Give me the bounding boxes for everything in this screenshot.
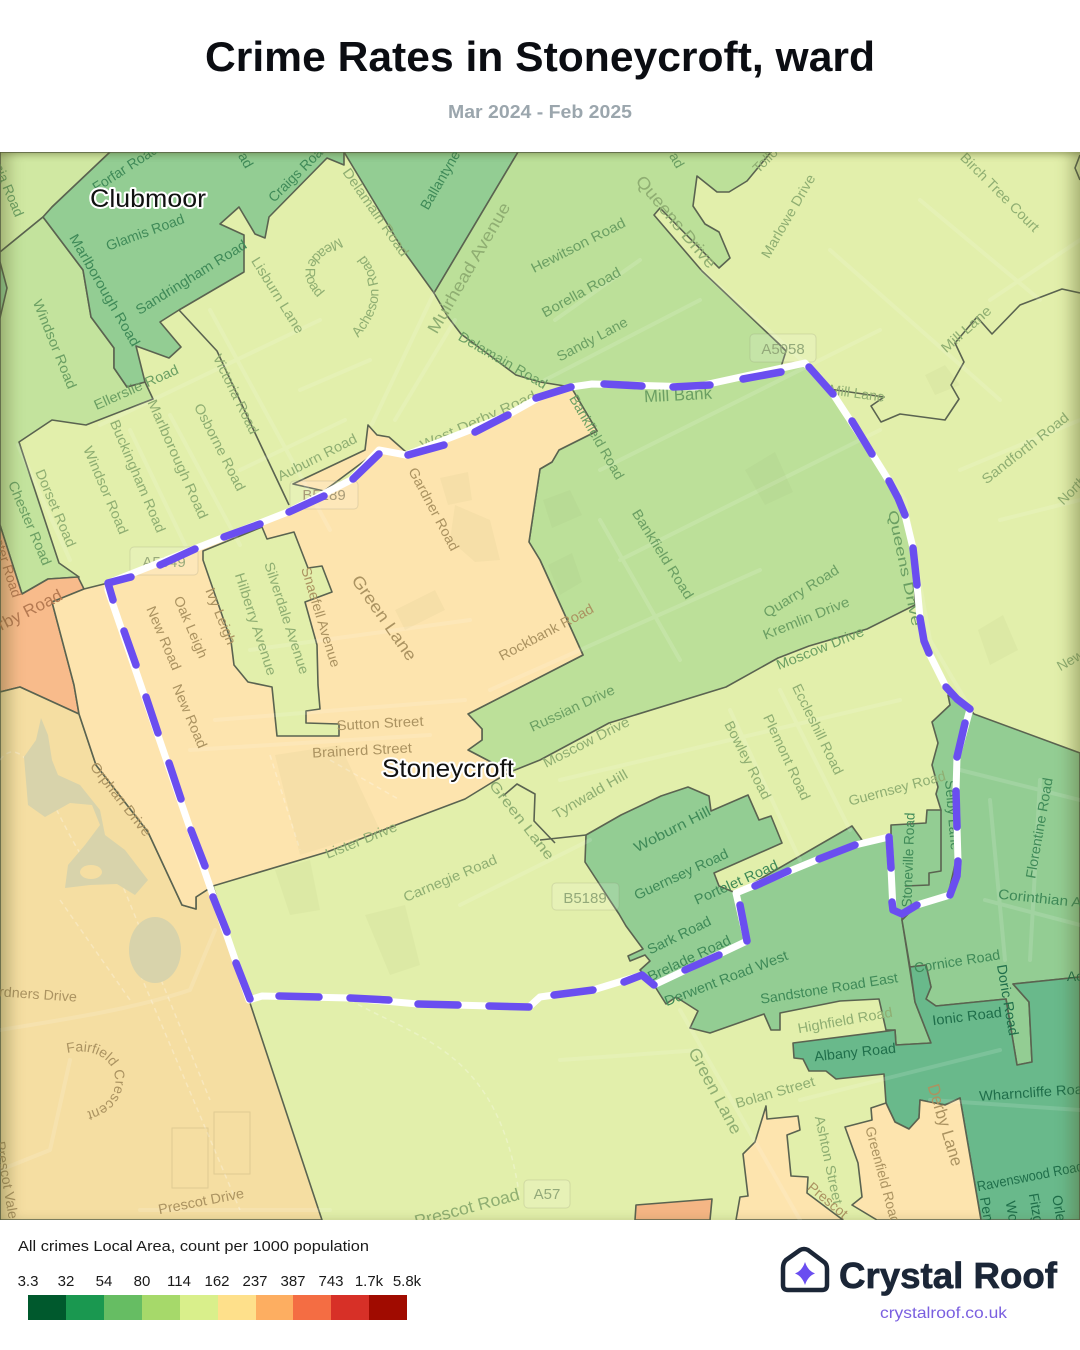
region: Green Lane core [52,387,597,909]
road labels on dark green: Ionic Road [931,1004,1003,1028]
roads [0,200,1080,1220]
legend values: 387 [280,1273,306,1290]
road labels on light green: ad [666,149,688,171]
boundary lines [179,155,1080,886]
region: Bankfield Road area [468,363,915,772]
road labels on low-crime background: Plemont Road [760,711,814,803]
icon: house with star [783,1249,827,1290]
logo url: crystalroof.co.uk [880,1305,1008,1322]
region: Portelet strip [752,825,863,882]
road labels on low-crime background [36,152,1080,1220]
road labels on medium green: Marlborough Road [66,231,144,349]
road labels on light green: Queens Drive [885,509,925,628]
road labels on low-crime background: Dorset Road [32,467,80,549]
road labels on orange areas: Orphan Drive [87,759,155,840]
place label: Stoneycroft: Stoneycroft [382,755,514,783]
region: Derby Road high crime [0,525,84,714]
road labels on low-crime background: Hilberry Avenue [232,571,280,678]
road labels on low-crime background: Lister Drive [323,818,399,862]
road labels on low-crime background: Sandforth Road [978,409,1072,487]
region: Ashton Street core [736,1106,843,1220]
road labels on orange areas: Snaefell Avenue [298,565,344,669]
road labels on low-crime background: Eccleshill Road [789,681,847,777]
shield: A5058: A5058 [761,341,805,358]
road labels on low-crime background: Guernsey Road [847,767,947,809]
legend values: 80 [134,1273,150,1290]
road labels on light green: Hewitson Road [528,214,628,276]
road labels on orange areas: Brainerd Street [312,739,412,761]
shield: B5189 south [552,883,619,910]
road labels on light green: Ellerslie Road [91,361,181,413]
road labels on low-crime background: Buckingham Road [107,417,169,535]
map background: low crime area [0,152,1080,1220]
region: Ballantyne [344,152,518,293]
road labels on dark green: Orlea [1049,1194,1071,1230]
shield: A5049: A5049 [142,554,186,571]
road labels on low-crime background: Auburn Road [275,430,359,484]
shield: B5189 north [290,481,358,509]
road labels on dark green [813,963,1080,1235]
title: Crime Rates in Stoneycroft, ward [205,33,875,80]
legend colour scale [28,1295,407,1320]
road labels on medium green: Sandringham Road [132,236,250,318]
road labels on medium green: Forfar Road [89,141,161,195]
road labels on light green: Delamain Road [456,328,550,392]
road labels on low-crime background: Prescot Road [412,1185,522,1231]
road labels on medium green: Guernsey Road [631,845,731,903]
road labels on low-crime background: Marlowe Drive [758,171,819,261]
legend values: 237 [242,1273,268,1290]
road labels on orange areas [0,468,960,1220]
road labels on light green: Windsor Road [30,297,80,391]
region: small west edge area [0,262,7,318]
road labels on low-crime background: Victoria Road [210,351,262,437]
road labels on light green: Chester Road [5,478,55,568]
road labels on medium green: Ballantyne [417,148,463,212]
road labels on orange areas: Green Lane [348,572,420,664]
road labels on orange areas: Derby Lane [923,1082,967,1168]
road labels on low-crime background: Delamain Road [340,165,412,259]
legend values: 1.7k [355,1273,384,1290]
road labels on dark green: Pemb [977,1196,999,1235]
region: Auburn Road wedge [293,425,406,491]
road labels on orange areas: Greenfield Road [862,1125,904,1225]
region: Greenfield Road core [845,1098,981,1220]
legend title: All crimes Local Area, count per 1000 population [18,1238,369,1255]
road labels on dark green: Doric Road [994,963,1022,1037]
road number shields [130,334,816,1208]
road labels on light green: Moscow Drive [774,623,866,673]
legend values: 32 [58,1273,74,1290]
legend values: 114 [167,1273,191,1290]
road labels on medium green: Derwent Road West [662,947,790,1009]
region: Derwent Road [654,837,931,1045]
map edge vignette [0,152,1080,1220]
road labels on light green: Russian Drive [527,681,617,735]
road labels on low-crime background: Tynwald Hill [550,766,630,822]
road labels on low-crime background: Queens Drive [632,172,720,272]
road labels on medium green: Sandstone Road East [759,969,899,1007]
road labels on orange areas: New Road [143,604,185,672]
road labels on light green: Kremlin Drive [760,593,852,643]
road labels on medium green [66,139,1080,1009]
shield: A57: A57 [534,1186,560,1203]
legend values: 3.3 [18,1273,38,1290]
shield: A5049 [130,547,198,575]
place label: Clubmoor: Clubmoor [90,185,206,213]
legend values: 743 [318,1273,344,1290]
park pitches [172,1112,250,1188]
road labels on low-crime background: Ashton Street [812,1114,846,1206]
road labels on orange areas: Ivy Leigh [202,585,240,647]
region: Newsham Park [0,687,322,1220]
road labels on dark green: Fitzge [1026,1192,1048,1232]
road labels on orange areas: Sutton Street [336,713,424,733]
road labels on medium green: Glamis Road [104,210,186,254]
road labels on low-crime background: Mill Lane [938,302,995,356]
road labels on low-crime background: Green Lane [486,777,558,863]
lake inner island [80,865,102,879]
region: Wharncliffe Road [793,965,1080,1220]
shield: A57 [524,1180,570,1208]
road labels on medium green: Florentine Road [1022,776,1056,880]
road labels on low-crime background: Meade Road [306,238,343,297]
road labels on light green: Bankfield Road [566,392,628,482]
region: Hewitson Road area [434,152,805,387]
road labels on low-crime background: Windsor Road [80,444,132,536]
road labels on orange areas: Gardner Road [405,465,463,553]
region: Silverdale Avenue [203,527,339,736]
road labels on orange areas: rdners Drive [0,983,78,1005]
road labels on low-crime background: West Derby Road [418,387,538,453]
lake south [129,917,181,983]
road labels on medium green: Stoneville Road [898,812,918,908]
road labels on light green: Mill Bank [644,384,713,406]
road labels on light green: Bankfield Road [629,506,697,602]
region: Prescot Road high crime [635,1199,712,1220]
lake north [24,718,148,895]
ward boundary: Stoneycroft [108,363,970,1007]
road labels on low-crime background: Silverdale Avenue [261,560,313,676]
legend values: 162 [204,1273,230,1290]
road labels on medium green: Sark Road [644,913,714,957]
region: Woburn Hill [585,787,782,985]
legend values [18,1273,422,1290]
road labels on dark green: Albany Road [813,1040,897,1064]
road labels on orange areas: Fairfield Crescent [66,1042,124,1120]
road labels on low-crime background: Lisburn Lane [248,254,308,336]
legend [18,1238,422,1320]
logo wordmark: Crystal Roof [839,1255,1058,1296]
region: north-west wedge [0,152,110,252]
road labels on medium green: Cornice Road [913,946,1001,976]
subtitle: date range: Mar 2024 - Feb 2025 [448,102,632,122]
road labels on low-crime background: Green Lane [684,1045,746,1137]
lakes in park [24,718,181,983]
road labels on medium green: Portelet Road [692,856,780,908]
road labels on orange areas: New Road [169,682,211,750]
region: Windsor Road area [0,217,153,594]
road labels on medium green: Craigs Road [265,139,331,205]
road labels on orange areas: Prescot Drive [157,1185,245,1217]
buildings and pitches [275,365,1018,975]
road labels on low-crime background: Tollo [749,144,781,176]
road labels on light green: Borella Road [539,264,623,320]
road labels on low-crime background: Acheson Road [353,256,378,338]
road labels on orange areas: Oak Leigh [171,593,211,661]
road labels on medium green: Selby Lane [942,779,964,851]
legend values: 5.8k [393,1273,422,1290]
road labels on low-crime background: Marlborough Road [144,397,212,521]
road labels on medium green: Brelade Road [645,932,733,984]
region: Corinthian Avenue [902,709,1080,1065]
region: Stoneville strip [891,695,970,914]
road labels on medium green: ad [235,149,257,171]
road labels on low-crime background: Bowley Road [721,718,775,802]
road labels on low-crime background: Birch Tree Court [957,149,1043,235]
road labels on low-crime background: Mill Lane [828,381,886,405]
road labels on low-crime background: Muirhead Avenue [424,199,514,337]
road labels on low-crime background: Moscow Drive [540,713,632,771]
road labels on low-crime background: Carnegie Road [401,851,499,905]
road labels on medium green: Woburn Hill [631,803,713,855]
legend values: 54 [96,1273,112,1290]
road labels on light green: Sandy Lane [554,314,630,364]
logo: Crystal Roof [783,1249,1058,1322]
road labels on dark green: Woo [1003,1200,1023,1231]
road labels on orange areas: Rockbank Road [496,600,596,664]
road labels on light green: Quarry Road [760,561,842,621]
road labels on orange areas: Prescot [805,1179,851,1221]
road labels on low-crime background: Osborne Road [191,401,249,493]
road labels on low-crime background: Bolan Street [733,1073,817,1111]
shield: B5189 north: B5189 [302,487,346,504]
shield: A5058 [750,334,816,362]
road labels on low-crime background: Highfield Road [796,1004,894,1036]
road labels on medium green: Corinthian A [997,886,1080,910]
region: Clubmoor [43,152,344,387]
shield: B5189 south: B5189 [563,890,607,907]
road labels on light green [0,149,925,735]
